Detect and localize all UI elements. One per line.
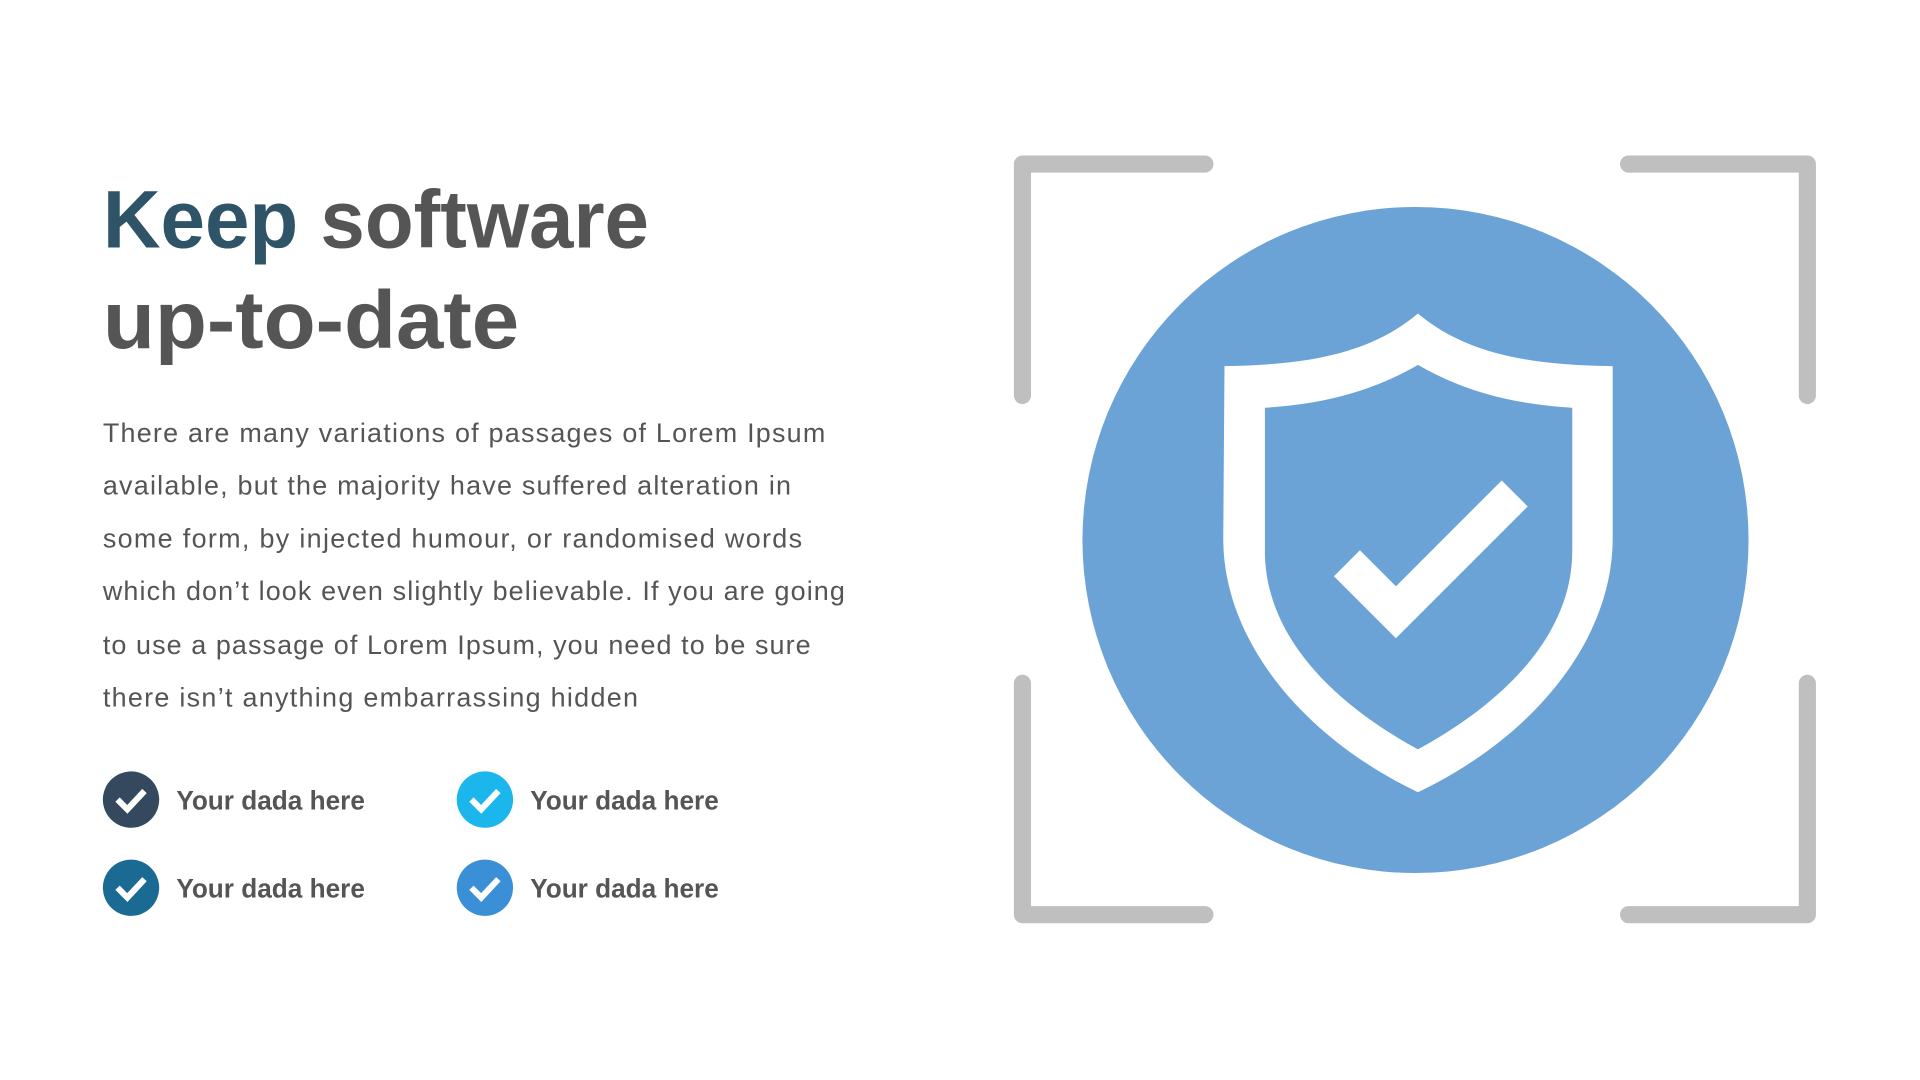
title: up-to-date: [103, 275, 519, 366]
check item 4: Your dada here: [530, 874, 719, 904]
check item 3: [103, 860, 365, 916]
check item 4: [457, 860, 719, 916]
paragraph text: [102, 418, 845, 713]
check item 2: [457, 771, 719, 828]
check item 2: Your dada here: [530, 785, 719, 815]
paragraph text: some form, by injected humour, or randomised words: [103, 523, 802, 553]
paragraph text: available, but the majority have suffered alteration in: [103, 471, 791, 501]
check item 1: [103, 771, 365, 828]
title: [103, 174, 649, 366]
title: Keep software: [103, 174, 649, 265]
paragraph text: there isn’t anything embarrassing hidden: [103, 683, 638, 713]
paragraph text: which don’t look even slightly believable. If you are going: [102, 576, 845, 606]
checklist: [103, 771, 719, 916]
check item 1: Your dada here: [176, 785, 365, 815]
paragraph text: There are many variations of passages of Lorem Ipsum: [103, 418, 825, 448]
paragraph text: to use a passage of Lorem Ipsum, you need to be sure: [103, 630, 811, 660]
check item 3: Your dada here: [176, 874, 365, 904]
icon: shield with check in circle: [1082, 207, 1749, 873]
frame brackets: [1022, 164, 1807, 915]
